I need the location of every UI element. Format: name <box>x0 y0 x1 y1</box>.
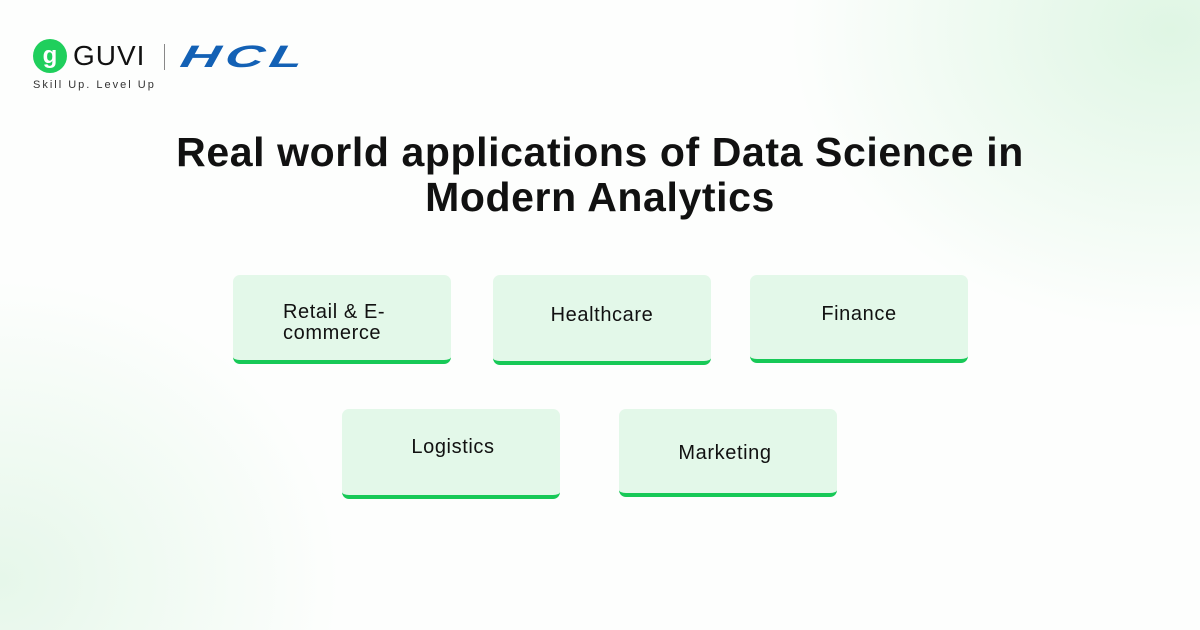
hcl text: HCL <box>177 39 312 74</box>
guvi text: GUVI <box>73 40 145 71</box>
title <box>176 129 1024 220</box>
tagline: Skill Up. Level Up <box>33 79 156 91</box>
card: marketing <box>619 409 837 497</box>
icon: guvi: g <box>43 42 57 69</box>
logo <box>33 39 312 91</box>
card: finance <box>750 275 968 363</box>
card: finance: Finance <box>821 303 897 325</box>
card: marketing: Marketing <box>678 442 772 464</box>
card: retail <box>233 275 451 364</box>
card: retail: Retail & E- <box>283 301 385 323</box>
card: healthcare <box>493 275 711 365</box>
card: logistics: Logistics <box>411 436 495 458</box>
title: Real world applications of Data Science in <box>176 129 1024 175</box>
title: Modern Analytics <box>425 174 775 220</box>
card: logistics <box>342 409 560 499</box>
icon: guvi <box>33 39 67 73</box>
card: healthcare: Healthcare <box>551 304 653 326</box>
card: retail: commerce <box>283 322 381 344</box>
